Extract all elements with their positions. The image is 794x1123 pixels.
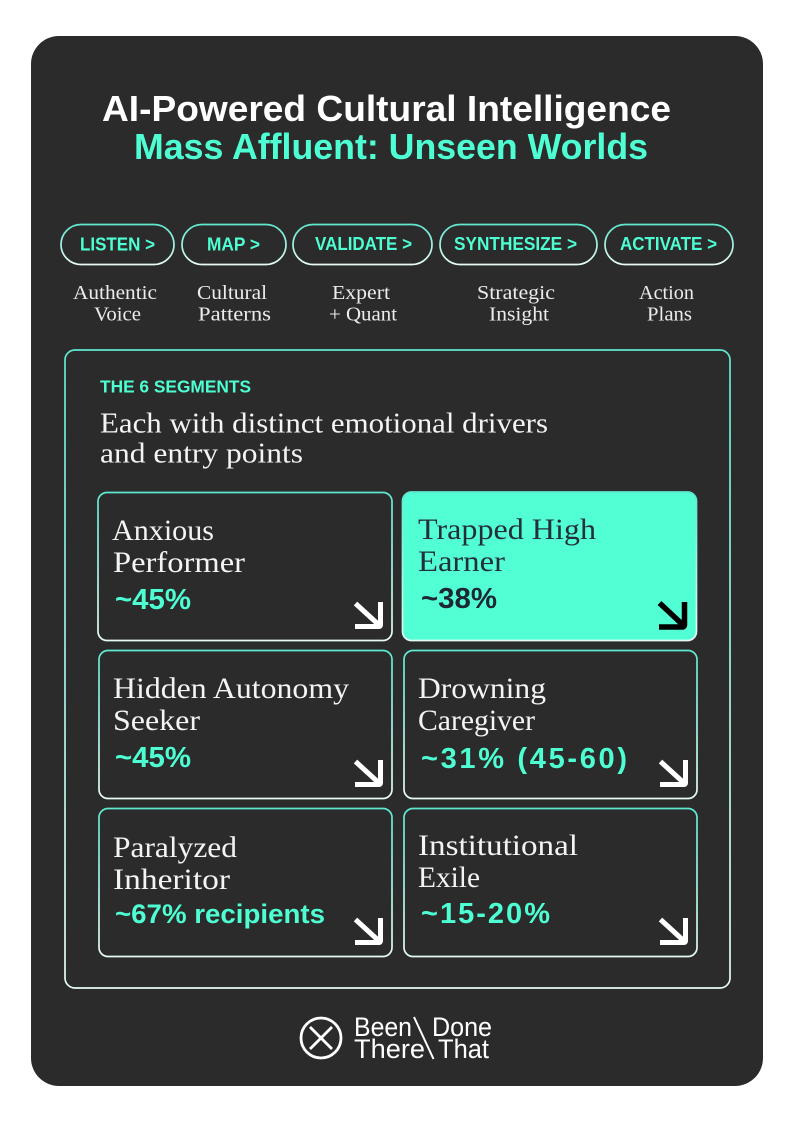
card: paralyzed inheritor: Inheritor — [113, 863, 230, 896]
card: anxious performer: ~45% — [115, 584, 191, 616]
card: anxious performer — [98, 492, 392, 640]
step descriptions: Strategic — [477, 282, 555, 304]
card: hidden autonomy seeker: Hidden Autonomy — [113, 672, 349, 705]
card: drowning caregiver — [404, 650, 697, 798]
segments description: Each with distinct emotional drivers — [100, 408, 548, 440]
card: trapped high earner: Earner — [418, 545, 505, 578]
step: listen: LISTEN > — [80, 234, 155, 254]
card: paralyzed inheritor: ~67% recipients — [115, 899, 325, 929]
step: validate — [293, 224, 432, 264]
step: listen — [61, 224, 174, 264]
card: drowning caregiver: ~31% (45-60) — [421, 743, 627, 775]
step: synthesize: SYNTHESIZE > — [454, 234, 577, 254]
card: anxious performer: Anxious — [112, 514, 214, 547]
logo — [301, 1012, 492, 1064]
segments description — [100, 408, 548, 470]
step: map — [182, 224, 286, 264]
card: hidden autonomy seeker — [99, 650, 392, 798]
process steps — [61, 224, 733, 264]
step descriptions: + Quant — [329, 304, 397, 326]
card: hidden autonomy seeker: Seeker — [113, 704, 200, 737]
icon: arrow — [355, 760, 380, 784]
logo wordmark: That — [438, 1034, 489, 1064]
panel: segments — [65, 350, 730, 988]
step descriptions: Authentic — [73, 282, 157, 304]
segments label: THE 6 SEGMENTS — [100, 376, 251, 396]
step descriptions: Patterns — [198, 304, 271, 326]
logo wordmark: Done — [432, 1012, 492, 1042]
icon: arrow — [355, 602, 380, 626]
icon: arrow — [659, 602, 684, 627]
step descriptions: Insight — [489, 304, 549, 326]
icon: arrow — [355, 918, 380, 942]
card: trapped high earner — [402, 492, 696, 640]
step descriptions — [73, 282, 694, 326]
step descriptions: Expert — [332, 282, 390, 304]
card: institutional exile: Exile — [418, 861, 480, 894]
icon: arrow — [660, 918, 686, 942]
card: institutional exile: Institutional — [418, 829, 578, 862]
card: drowning caregiver: Drowning — [418, 672, 546, 705]
card: paralyzed inheritor — [99, 808, 392, 956]
step descriptions: Plans — [647, 304, 692, 326]
step descriptions: Voice — [94, 304, 141, 326]
icon: circled x — [301, 1018, 341, 1058]
card: trapped high earner: ~38% — [421, 583, 497, 615]
icon: arrow — [660, 760, 686, 784]
step: synthesize — [440, 224, 597, 264]
segments description: and entry points — [100, 438, 303, 470]
logo wordmark: Been — [354, 1012, 412, 1042]
step: activate — [605, 224, 733, 264]
step descriptions: Cultural — [197, 282, 267, 304]
title — [102, 88, 671, 167]
logo wordmark: There — [354, 1034, 425, 1064]
card: institutional exile — [404, 808, 697, 956]
card: trapped high earner: Trapped High — [418, 513, 596, 546]
logo wordmark — [354, 1012, 492, 1064]
step descriptions: Action — [639, 282, 694, 304]
card: institutional exile: ~15-20% — [421, 898, 550, 930]
title: Mass Affluent: Unseen Worlds — [134, 126, 648, 167]
step: validate: VALIDATE > — [315, 234, 412, 254]
step: activate: ACTIVATE > — [620, 234, 717, 254]
card: anxious performer: Performer — [113, 546, 245, 579]
card: drowning caregiver: Caregiver — [418, 704, 535, 737]
card: hidden autonomy seeker: ~45% — [115, 742, 191, 774]
step: map: MAP > — [207, 234, 260, 254]
card: paralyzed inheritor: Paralyzed — [113, 831, 237, 864]
title: AI-Powered Cultural Intelligence — [102, 88, 671, 129]
